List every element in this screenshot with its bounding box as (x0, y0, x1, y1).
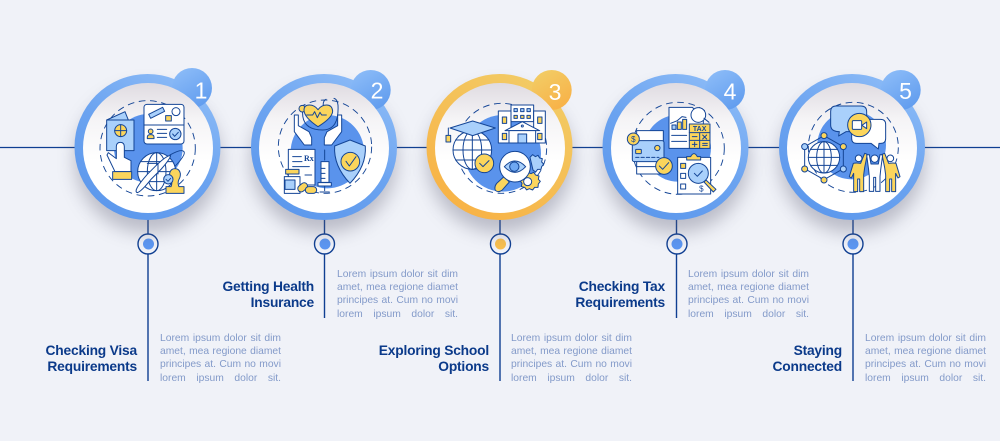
icon: card, tax calculator and clipboard (627, 102, 724, 194)
title: Checking Visa Requirements (46, 343, 138, 374)
title: Getting Health Insurance: Insurance (251, 295, 314, 310)
title: Checking Visa Requirements: Checking Visa (46, 343, 137, 358)
text block 5: principes at. Cum no movi (865, 359, 986, 370)
text block 1: amet, mea regione diamet (160, 346, 281, 357)
connector 3 (490, 215, 510, 381)
medallion 1: 1 (195, 78, 207, 104)
step 5 graphic (779, 70, 925, 381)
text block 4 (688, 268, 809, 320)
text block 4: principes at. Cum no movi (688, 295, 809, 306)
title: Getting Health Insurance: Getting Health (223, 279, 314, 294)
medallion 3: 3 (549, 79, 561, 105)
text block 5: lorem ipsum dolor sit. (865, 373, 986, 384)
medallion 5: 5 (899, 78, 912, 104)
medallion 2 (251, 70, 397, 233)
title: Checking Tax Requirements (575, 279, 665, 310)
title: Exploring School Options: Options (438, 359, 489, 374)
text block 1: principes at. Cum no movi (160, 359, 281, 370)
title: Checking Tax Requirements: Checking Tax (579, 279, 665, 294)
text block 2: principes at. Cum no movi (337, 295, 458, 306)
connector 2 (314, 215, 334, 318)
title: Getting Health Insurance (223, 279, 314, 310)
step 1 graphic (74, 68, 221, 381)
text block 4: Lorem ipsum dolor sit dim (688, 268, 809, 280)
medallion 1 (74, 68, 221, 233)
text block 3: lorem ipsum dolor sit. (511, 373, 632, 384)
step 3 graphic (426, 70, 573, 381)
icon: health care hands, prescription and shield: Rx (304, 154, 314, 163)
medallion 5 (779, 70, 925, 233)
text block 2: amet, mea regione diamet (337, 282, 458, 293)
text block 2: lorem ipsum dolor sit. (337, 309, 458, 320)
medallion 4: 4 (724, 78, 737, 104)
connector 1 (138, 215, 158, 381)
connector 5 (843, 215, 863, 381)
title: Checking Tax Requirements: Requirements (575, 295, 665, 310)
step 2 graphic (251, 70, 397, 318)
timeline axis (0, 146, 1000, 148)
text block 3 (511, 332, 632, 384)
icon: card, tax calculator and clipboard: $ (631, 135, 636, 144)
text block 2 (337, 268, 458, 320)
text block 5: amet, mea regione diamet (865, 346, 986, 357)
title: Exploring School Options (379, 343, 489, 374)
icon: graduation cap, school and magnifier (446, 103, 547, 193)
connector 4 (667, 215, 687, 318)
text block 3: Lorem ipsum dolor sit dim (511, 332, 632, 344)
text block 1: lorem ipsum dolor sit. (160, 373, 281, 384)
icon: card, tax calculator and clipboard: $ (699, 185, 704, 194)
medallion 4 (602, 70, 749, 233)
text block 5: Lorem ipsum dolor sit dim (865, 332, 986, 344)
text block 4: amet, mea regione diamet (688, 282, 809, 293)
title: Staying Connected (772, 343, 842, 374)
text block 1: Lorem ipsum dolor sit dim (160, 332, 281, 344)
title: Checking Visa Requirements: Requirements (47, 359, 137, 374)
step 4 graphic (602, 70, 749, 318)
text block 3: amet, mea regione diamet (511, 346, 632, 357)
medallion 3 (426, 70, 573, 233)
text block 2: Lorem ipsum dolor sit dim (337, 268, 458, 280)
text block 4: lorem ipsum dolor sit. (688, 309, 809, 320)
text block 3: principes at. Cum no movi (511, 359, 632, 370)
text block 1 (160, 332, 281, 384)
medallion 2: 2 (371, 78, 383, 104)
title: Staying Connected: Connected (772, 359, 842, 374)
icon: passport, visa card, globe and stamp (100, 101, 195, 196)
title: Staying Connected: Staying (794, 343, 842, 358)
text block 5 (865, 332, 986, 384)
icon: health care hands, prescription and shield (278, 98, 372, 193)
icon: chat bubbles, connected globe and people (802, 102, 900, 192)
title: Exploring School Options: Exploring School (379, 343, 489, 358)
icon: card, tax calculator and clipboard: TAX (693, 126, 707, 133)
